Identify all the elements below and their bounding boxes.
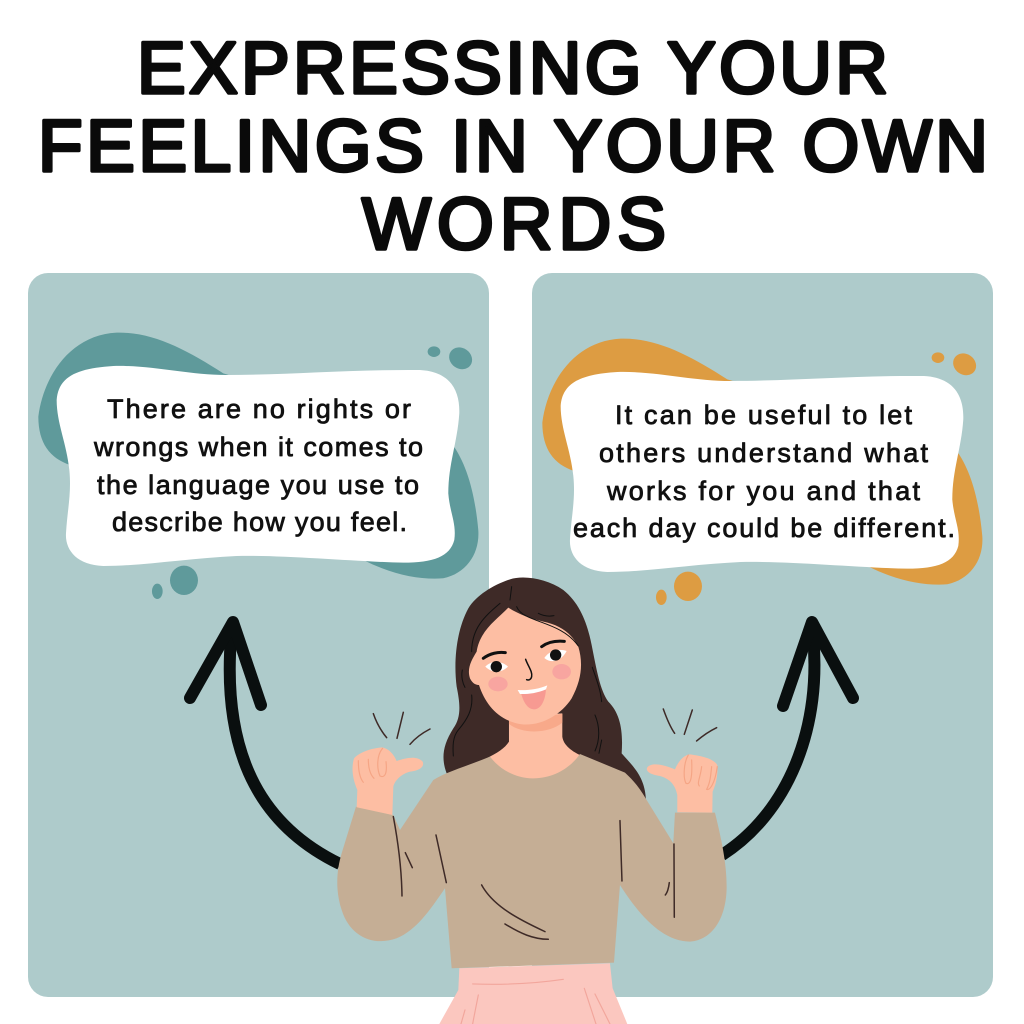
right callout — [542, 339, 982, 605]
orange blob behind callout — [542, 339, 982, 605]
left callout text: wrongs when it comes to — [93, 432, 423, 462]
arrow: right curved up — [722, 622, 853, 855]
right callout text — [573, 400, 955, 543]
neck shadow — [509, 714, 562, 731]
right callout text: works for you and that — [606, 476, 920, 506]
title: EXPRESSING YOUR — [137, 28, 888, 109]
arrow: left curved up — [190, 622, 340, 864]
nose — [526, 659, 532, 680]
white callout shape — [57, 366, 459, 566]
left callout text: There are no rights or — [107, 394, 411, 424]
cheeks — [488, 664, 571, 691]
neck — [487, 713, 583, 800]
panel: left background — [28, 273, 489, 997]
right callout text: each day could be different. — [573, 513, 955, 543]
title: WORDS — [362, 184, 666, 265]
title — [38, 28, 988, 265]
left callout text: the language you use to — [97, 470, 419, 500]
left hand — [353, 747, 423, 815]
title: FEELINGS IN YOUR OWN — [38, 106, 988, 187]
left callout text: describe how you feel. — [112, 507, 407, 537]
face — [469, 608, 581, 724]
left callout text — [93, 394, 423, 537]
finger lines — [358, 748, 717, 789]
woman pointing at herself — [337, 578, 727, 1024]
left callout — [38, 333, 478, 599]
skirt — [439, 963, 627, 1024]
hair — [443, 578, 646, 837]
white callout shape — [561, 372, 963, 572]
right callout text: It can be useful to let — [615, 400, 912, 430]
mouth — [518, 685, 547, 709]
teal blob behind callout — [38, 333, 478, 599]
hair strands — [453, 587, 602, 756]
right hand — [647, 754, 717, 813]
sweater — [337, 754, 727, 968]
panel: right background — [532, 273, 993, 997]
hair and clothing detail lines — [373, 709, 717, 939]
skirt folds — [461, 979, 610, 1024]
right callout text: others understand what — [599, 438, 928, 468]
eyes — [483, 641, 567, 672]
